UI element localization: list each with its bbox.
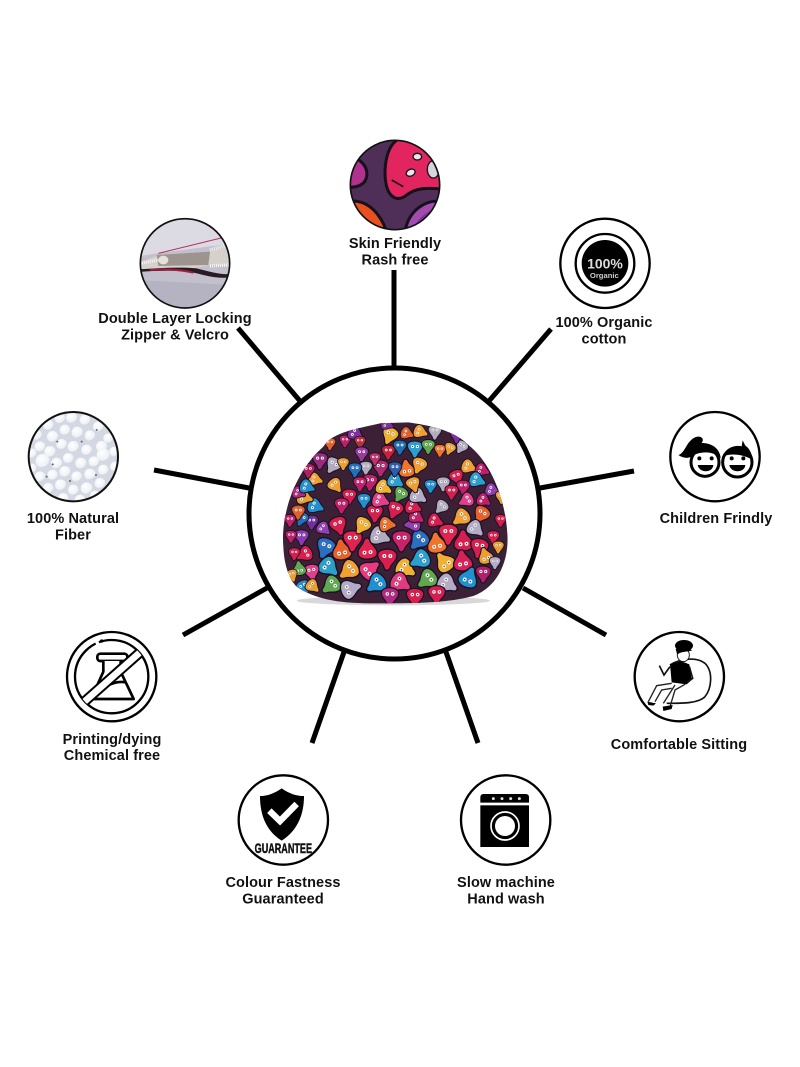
label: double layer zipper: Zipper & Velcro [121,328,229,344]
feature: comfortable sitting [611,632,747,753]
feature: organic cotton [555,219,653,348]
icon: crossed out flask [67,632,156,721]
label: comfortable sitting: Comfortable Sitting [611,737,747,753]
icon: fabric close-up [350,140,440,230]
label: skin friendly: Skin Friendly [349,236,441,252]
spokes connecting features to the centre [154,270,634,743]
icon: zipper close-up [140,218,230,309]
label: double layer zipper: Double Layer Locking [98,311,252,327]
central ring [249,368,540,659]
icon: white beads [27,410,120,505]
label: natural fiber: 100% Natural [27,511,119,527]
label: organic cotton: cotton [582,332,626,348]
icon: 100% organic badge: Organic [590,271,620,280]
label: chemical free: Printing/dying [63,732,161,748]
icon: 100% organic badge [560,219,650,308]
feature: children friendly [660,412,772,527]
label: organic cotton: 100% Organic [555,315,653,331]
label: chemical free: Chemical free [64,748,160,764]
label: slow machine hand wash: Hand wash [467,892,545,908]
icon: two children faces [670,412,760,501]
feature: chemical free [63,632,161,764]
icon: guarantee shield: GUARANTEE [255,840,312,856]
icon: 100% organic badge: 100% [587,255,623,271]
feature: slow machine hand wash [457,775,555,908]
feature: double layer zipper [98,217,252,344]
label: slow machine hand wash: Slow machine [457,875,555,891]
label: colour fastness: Guaranteed [242,892,324,908]
bean bag illustration [283,417,508,608]
feature: colour fastness [225,775,341,908]
icon: person on bean bag [635,632,724,721]
feature: skin friendly [349,140,441,264]
label: children friendly: Children Frindly [660,511,772,527]
feature: natural fiber [27,410,120,544]
label: skin friendly: Rash free [362,252,428,268]
icon: washing machine [461,775,550,865]
label: natural fiber: Fiber [55,528,91,544]
label: colour fastness: Colour Fastness [225,875,341,891]
